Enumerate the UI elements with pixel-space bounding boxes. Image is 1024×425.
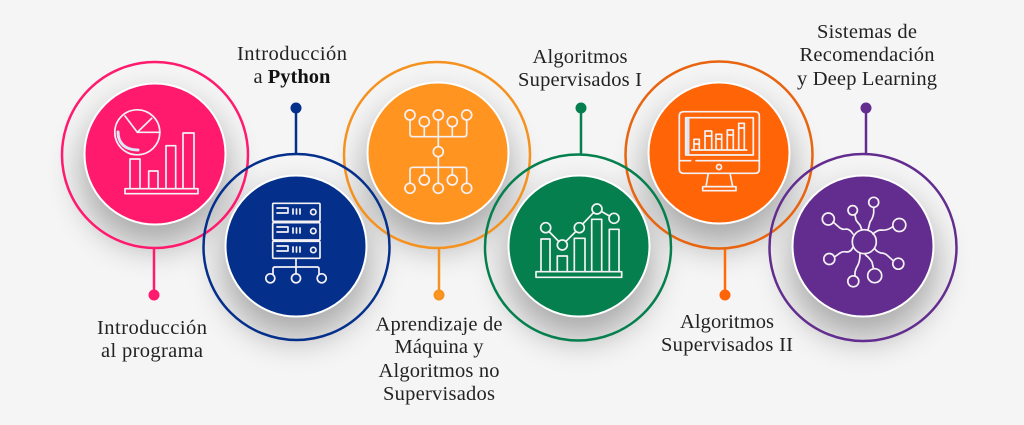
icon: server rack <box>266 203 326 283</box>
label: y Deep Learning <box>797 68 937 90</box>
step 2: Introducción a Python <box>204 43 390 340</box>
ring and connector <box>485 104 671 340</box>
icon: line and bar chart <box>536 204 622 277</box>
label: Aprendizaje de <box>376 314 502 336</box>
label: Algoritmos <box>680 311 774 333</box>
step 1: Introducción al programa <box>62 62 248 362</box>
step 3: Aprendizaje de Máquina <box>344 62 530 405</box>
label: Supervisados II <box>661 334 793 356</box>
step 4: Algoritmos Supervisados I <box>485 46 671 340</box>
ring and connector <box>770 104 956 341</box>
label: Supervisados I <box>518 69 642 91</box>
label: Introducción <box>97 317 207 339</box>
ring and connector <box>344 62 530 300</box>
label: Supervisados <box>383 383 495 405</box>
disc <box>648 82 790 224</box>
icon: pie and bar chart <box>115 110 198 194</box>
disc <box>792 176 934 316</box>
label: Máquina y <box>394 336 484 358</box>
icon: hierarchy tree <box>405 110 472 193</box>
icon: neural network <box>822 197 906 287</box>
label: a Python <box>254 66 330 88</box>
label: Recomendación <box>800 44 934 66</box>
label: Introducción <box>237 43 347 65</box>
ring and connector <box>62 62 248 300</box>
ring and connector <box>626 62 812 300</box>
label: Sistemas de <box>817 21 917 43</box>
icon: monitor with chart <box>679 112 759 191</box>
step 6: Sistemas de Recomendación y Deep Learning <box>770 21 956 341</box>
disc <box>226 176 366 316</box>
label: al programa <box>101 340 203 362</box>
step 5: Algoritmos Supervisados II <box>626 62 812 356</box>
disc <box>368 82 508 224</box>
ring and connector <box>204 104 390 340</box>
label: Algoritmos <box>532 46 628 68</box>
disc <box>508 176 650 316</box>
label: Algoritmos no <box>378 360 500 382</box>
disc <box>84 84 226 224</box>
